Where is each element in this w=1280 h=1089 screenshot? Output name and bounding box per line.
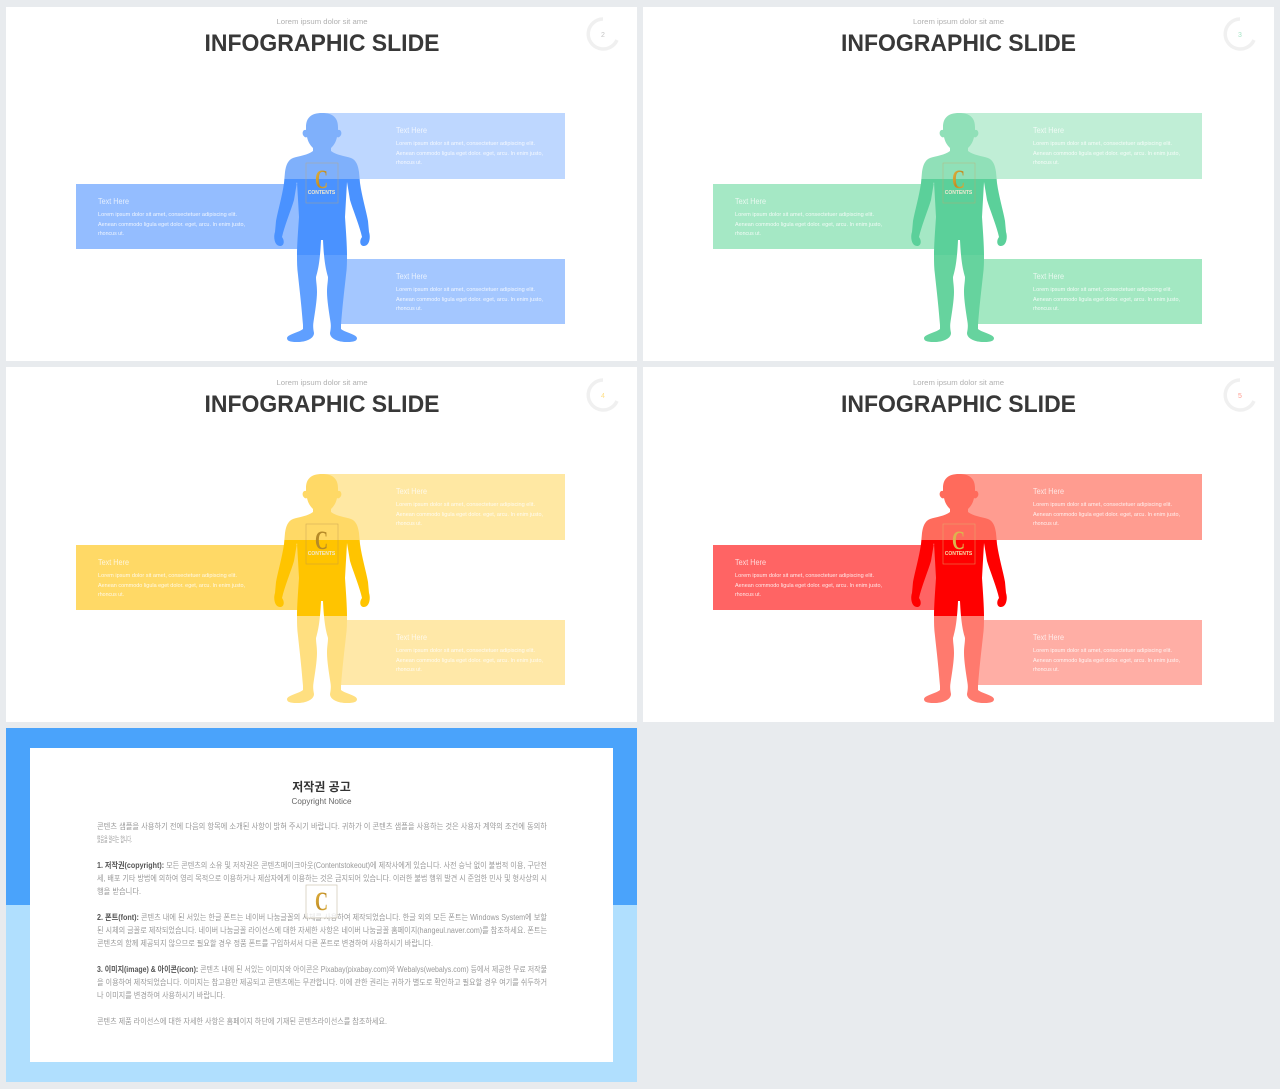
band: left xyxy=(713,184,937,249)
band: top: Aenean commodo ligula eget dolor. eget, arcu. In enim justo, xyxy=(396,512,543,518)
band: top xyxy=(322,113,565,179)
band: top: Lorem ipsum dolor sit amet, consectetuer adipiscing elit. xyxy=(396,141,535,147)
band: bottom: Aenean commodo ligula eget dolor. eget, arcu. In enim justo, xyxy=(1033,658,1180,664)
logo: C xyxy=(315,165,328,194)
band: top: Aenean commodo ligula eget dolor. eget, arcu. In enim justo, xyxy=(396,151,543,157)
notice subheading: Copyright Notice xyxy=(292,796,352,806)
band: bottom: Text Here xyxy=(396,272,427,281)
logo: CONTENTS xyxy=(308,190,336,196)
band: left: Aenean commodo ligula eget dolor. eget, arcu. In enim justo, xyxy=(735,222,882,228)
band: top: Text Here xyxy=(1033,126,1064,135)
logo: C xyxy=(315,526,328,555)
page number badge: 3 xyxy=(1238,32,1242,39)
band: top xyxy=(959,113,1202,179)
logo xyxy=(306,524,338,564)
band: left: Text Here xyxy=(98,197,129,206)
band: bottom: Text Here xyxy=(396,633,427,642)
notice intro: 였음을 알리는 합니다. xyxy=(97,834,132,844)
watermark logo xyxy=(306,885,337,918)
band: top: Lorem ipsum dolor sit amet, consectetuer adipiscing elit. xyxy=(1033,502,1172,508)
band: top: Lorem ipsum dolor sit amet, consectetuer adipiscing elit. xyxy=(396,502,535,508)
band: bottom xyxy=(340,620,565,685)
band: left: Lorem ipsum dolor sit amet, consectetuer adipiscing elit. xyxy=(98,212,237,218)
notice intro xyxy=(97,821,548,844)
band: top: Aenean commodo ligula eget dolor. eget, arcu. In enim justo, xyxy=(1033,151,1180,157)
notice section 1: 행을 받습니다. xyxy=(97,886,141,896)
logo: C xyxy=(952,526,965,555)
panel: blue slide xyxy=(6,7,637,361)
subtitle: Lorem ipsum dolor sit ame xyxy=(913,17,1004,26)
human figure xyxy=(274,474,370,703)
page number badge: 4 xyxy=(601,393,605,400)
band: left: rhoncus ut. xyxy=(98,592,124,598)
notice section 1: 1. 저작권(copyright): 모든 콘텐츠의 소유 및 저작권은 콘텐츠메이크아웃(Contentstokeout)에 제작사에게 있습니다. 사전 승낙 없이 불법적 이용, 구단전 xyxy=(97,860,547,870)
band: top: rhoncus ut. xyxy=(396,521,422,527)
subtitle: Lorem ipsum dolor sit ame xyxy=(276,378,368,387)
logo: CONTENTS xyxy=(308,551,336,557)
band: top: Text Here xyxy=(1033,487,1064,496)
band: left: Lorem ipsum dolor sit amet, consectetuer adipiscing elit. xyxy=(735,212,874,218)
band: top: Text Here xyxy=(396,126,427,135)
band: top: rhoncus ut. xyxy=(396,160,422,166)
band: bottom: Aenean commodo ligula eget dolor. eget, arcu. In enim justo, xyxy=(396,658,543,664)
notice section 1: 세, 배포 기타 방법에 의하여 영리 목적으로 이용하거나 제삼자에게 이용하는 것은 금지되어 있습니다. 이러한 불법 행위 발견 시 준엄한 민사 및 형사상의 시 xyxy=(97,873,547,883)
notice heading: 저작권 공고 xyxy=(292,779,351,794)
band: left: Aenean commodo ligula eget dolor. eget, arcu. In enim justo, xyxy=(98,583,245,589)
band: left xyxy=(76,545,300,610)
band: left: rhoncus ut. xyxy=(735,592,761,598)
panel: yellow slide xyxy=(6,367,637,722)
notice section 2: 된 시체의 글꼴로 제작되었습니다. 네이버 나눔글꼴 라이선스에 대한 자세한 사항은 네이버 나눔글꼴 홈페이지(hangeul.naver.com)를 참조하세요. 폰트는 xyxy=(97,925,547,935)
logo: C xyxy=(952,165,965,194)
title: INFOGRAPHIC SLIDE xyxy=(841,391,1076,418)
panel: green slide xyxy=(643,7,1274,361)
band: bottom: Aenean commodo ligula eget dolor. eget, arcu. In enim justo, xyxy=(396,297,543,303)
logo xyxy=(943,524,975,564)
title: INFOGRAPHIC SLIDE xyxy=(204,391,440,418)
band: bottom: rhoncus ut. xyxy=(396,306,422,312)
watermark logo: C xyxy=(315,887,328,916)
page number badge xyxy=(588,380,617,410)
band: bottom xyxy=(977,259,1202,324)
notice section 2: 2. 폰트(font): 콘텐츠 내에 된 서있는 한글 폰트는 네이버 나눔글꼴의 서체를 사용하여 제작되었습니다. 한글 외의 모든 폰트는 Windows System에 보할 xyxy=(97,912,548,922)
band: bottom xyxy=(977,620,1202,685)
band: left: Lorem ipsum dolor sit amet, consectetuer adipiscing elit. xyxy=(98,573,237,579)
notice section 3: 나 이미지를 변경하여 사용하시기 바랍니다. xyxy=(97,990,225,1000)
logo xyxy=(943,163,975,203)
notice section 3: 3. 이미지(image) & 아이콘(icon): 콘텐츠 내에 된 서있는 이미지와 아이콘은 Pixabay(pixabay.com)와 Webalys(webalys.com) 등에서 제공한 무료 저작물 xyxy=(97,964,547,974)
band: left xyxy=(713,545,937,610)
band: top: Lorem ipsum dolor sit amet, consectetuer adipiscing elit. xyxy=(1033,141,1172,147)
human figure xyxy=(911,474,1007,703)
logo: CONTENTS xyxy=(945,551,973,557)
notice closing line: 콘텐츠 제품 라이선스에 대한 자세한 사항은 홈페이지 하단에 기재된 콘텐츠라이선스를 참조하세요. xyxy=(97,1016,387,1026)
band: left xyxy=(76,184,300,249)
notice section 2 xyxy=(97,912,548,948)
subtitle: Lorem ipsum dolor sit ame xyxy=(276,17,368,26)
band: bottom: Lorem ipsum dolor sit amet, consectetuer adipiscing elit. xyxy=(1033,648,1172,654)
title: INFOGRAPHIC SLIDE xyxy=(204,30,440,57)
band: left: Text Here xyxy=(735,197,766,206)
band: left: Text Here xyxy=(735,558,766,567)
band: top: Text Here xyxy=(396,487,427,496)
band: left: Aenean commodo ligula eget dolor. eget, arcu. In enim justo, xyxy=(735,583,882,589)
subtitle: Lorem ipsum dolor sit ame xyxy=(913,378,1004,387)
notice section 2: 콘텐츠의 함께 제공되지 않으므로 필요할 경우 정품 폰트를 구입하셔서 다른 폰트로 변경하여 사용하시기 바랍니다. xyxy=(97,938,433,948)
page number badge: 5 xyxy=(1238,393,1242,400)
band: bottom: Text Here xyxy=(1033,633,1064,642)
band: bottom: Aenean commodo ligula eget dolor. eget, arcu. In enim justo, xyxy=(1033,297,1180,303)
page number badge xyxy=(588,19,617,49)
page number badge xyxy=(1225,380,1254,410)
band: bottom: rhoncus ut. xyxy=(1033,306,1059,312)
page number badge: 2 xyxy=(601,32,605,39)
band: bottom: Lorem ipsum dolor sit amet, consectetuer adipiscing elit. xyxy=(396,287,535,293)
band: top xyxy=(959,474,1202,540)
notice section 1 xyxy=(97,860,547,896)
human figure xyxy=(911,113,1007,342)
title: INFOGRAPHIC SLIDE xyxy=(841,30,1076,57)
band: top xyxy=(322,474,565,540)
band: bottom: rhoncus ut. xyxy=(1033,667,1059,673)
band: left: rhoncus ut. xyxy=(735,231,761,237)
band: bottom: rhoncus ut. xyxy=(396,667,422,673)
band: left: Lorem ipsum dolor sit amet, consectetuer adipiscing elit. xyxy=(735,573,874,579)
band: bottom: Text Here xyxy=(1033,272,1064,281)
band: top: rhoncus ut. xyxy=(1033,521,1059,527)
band: top: rhoncus ut. xyxy=(1033,160,1059,166)
notice section 3: 을 이용하여 제작되었습니다. 이미지는 참고용만 제공되고 콘텐츠에는 무관합니다. 이에 관한 권리는 귀하가 별도로 확인하고 필요할 경우 여기를 쉬두하거 xyxy=(97,977,547,987)
band: left: Aenean commodo ligula eget dolor. eget, arcu. In enim justo, xyxy=(98,222,245,228)
band: bottom: Lorem ipsum dolor sit amet, consectetuer adipiscing elit. xyxy=(396,648,535,654)
band: bottom: Lorem ipsum dolor sit amet, consectetuer adipiscing elit. xyxy=(1033,287,1172,293)
notice intro: 콘텐츠 샘플을 사용하기 전에 다음의 항목에 소개된 사항이 밝혀 주시기 바랍니다. 귀하가 이 콘텐츠 샘플을 사용하는 것은 사용자 계약의 조건에 동의하 xyxy=(97,821,548,831)
band: left: Text Here xyxy=(98,558,129,567)
notice section 3 xyxy=(97,964,547,1000)
panel: copyright notice xyxy=(6,728,637,1082)
band: left: rhoncus ut. xyxy=(98,231,124,237)
panel: red slide xyxy=(643,367,1274,722)
band: bottom xyxy=(340,259,565,324)
logo xyxy=(306,163,338,203)
band: top: Aenean commodo ligula eget dolor. eget, arcu. In enim justo, xyxy=(1033,512,1180,518)
page number badge xyxy=(1225,19,1254,49)
human figure xyxy=(274,113,370,342)
logo: CONTENTS xyxy=(945,190,973,196)
